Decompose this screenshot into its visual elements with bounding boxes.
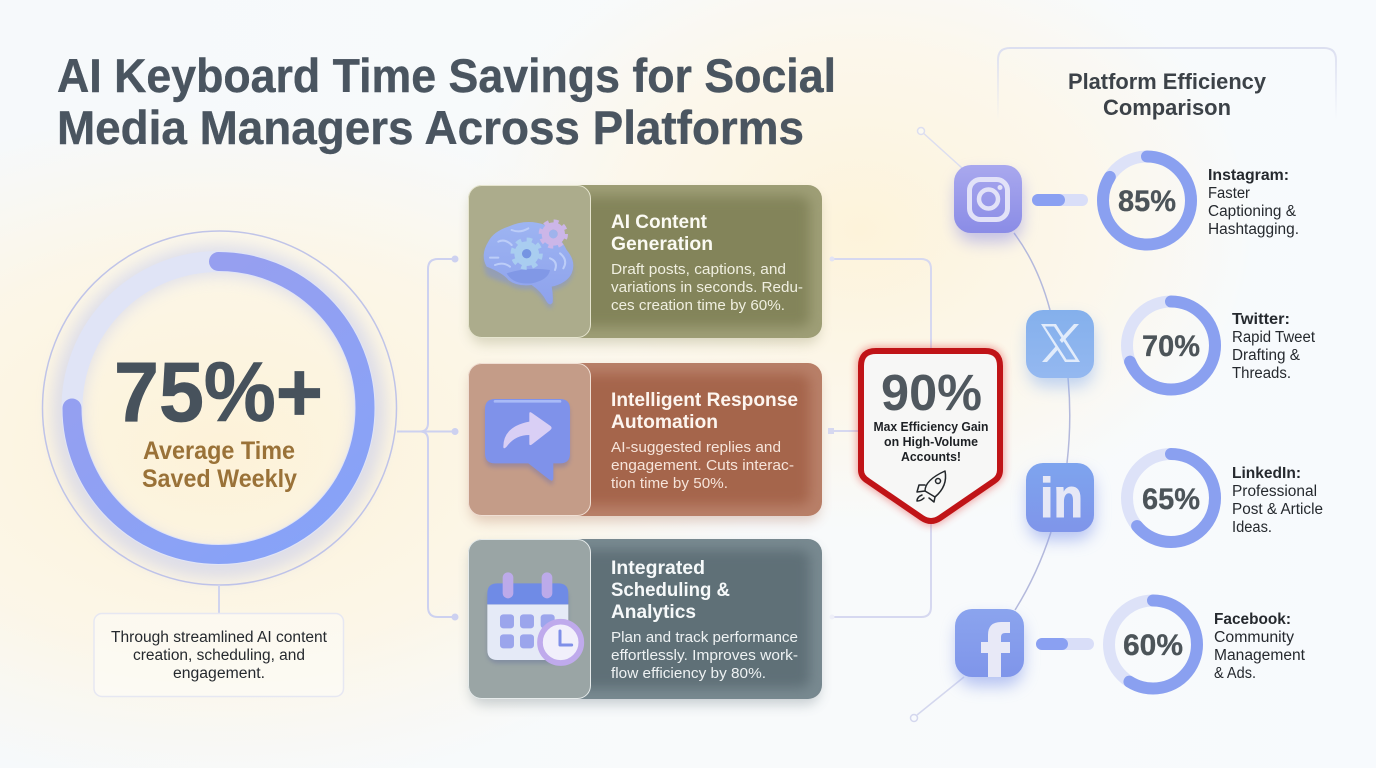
label: Faster — [1208, 185, 1250, 202]
donut 65%: 65% — [1142, 483, 1200, 516]
card body: AI-suggested replies and — [611, 440, 781, 456]
label: Twitter: — [1232, 311, 1290, 328]
label: Drafting & — [1232, 347, 1301, 364]
card body — [611, 440, 794, 492]
label: Professional — [1232, 483, 1317, 500]
hero label: Saved Weekly — [142, 465, 297, 493]
label: Captioning & — [1208, 203, 1297, 220]
caption box: creation, scheduling, and — [133, 647, 305, 664]
card heading — [611, 389, 798, 433]
icon pane — [468, 364, 590, 516]
caption box: engagement. — [173, 665, 265, 682]
title: Media Managers Across Platforms — [57, 101, 804, 154]
label: Facebook: — [1214, 611, 1291, 628]
donut 70% — [1127, 302, 1215, 390]
right connectors from cards to badge — [828, 256, 931, 620]
arrow — [503, 412, 552, 448]
progress pill — [1036, 638, 1094, 650]
label: Management — [1214, 647, 1306, 664]
hero label: Average Time — [143, 437, 295, 465]
icon: brain with gears — [484, 221, 573, 308]
label — [1232, 311, 1316, 382]
label — [1208, 167, 1299, 238]
label: Hashtagging. — [1208, 221, 1299, 238]
card body: flow efficiency by 80%. — [611, 666, 766, 682]
icon: in logo: in — [1040, 466, 1083, 529]
progress pill — [1032, 194, 1088, 206]
card heading: Scheduling & — [611, 579, 730, 601]
platform: Instagram — [954, 156, 1299, 244]
label: Community — [1214, 629, 1294, 646]
card: Intelligent Response Automation — [468, 363, 822, 522]
card: AI Content Generation — [468, 185, 822, 344]
donut 60%: 60% — [1123, 629, 1183, 662]
label: Ideas. — [1232, 519, 1272, 536]
badge text: Accounts! — [901, 450, 961, 464]
card heading: AI Content — [611, 211, 707, 233]
hero progress ring: 75% — [42, 231, 396, 585]
badge: 90% max efficiency — [861, 351, 1000, 521]
hero label — [142, 437, 297, 493]
card body: variations in seconds. Redu- — [611, 280, 803, 296]
left bracket connector — [397, 256, 458, 620]
hero value: 75%+ — [114, 345, 323, 439]
icon: rocket — [917, 471, 946, 502]
icon: Instagram logo — [970, 180, 1008, 220]
card body: tion time by 50%. — [611, 476, 728, 492]
donut 65% — [1127, 454, 1215, 542]
donut 70%: 70% — [1142, 330, 1200, 363]
platform: Facebook — [955, 600, 1306, 688]
badge text: Max Efficiency Gain — [874, 420, 988, 434]
gear small — [541, 221, 566, 247]
icon: f logo — [981, 622, 1010, 677]
platform connector curve — [910, 128, 1070, 722]
caption box — [94, 614, 344, 696]
badge text: on High-Volume — [884, 435, 978, 449]
card: Integrated Scheduling and Analytics — [468, 539, 822, 705]
badge value: 90% — [881, 364, 982, 421]
panel: platform comparison header — [998, 48, 1336, 120]
label — [1214, 611, 1306, 682]
donut 60% — [1109, 600, 1197, 688]
icon: X logo — [1041, 324, 1080, 362]
label: Post & Article — [1232, 501, 1323, 518]
card heading — [611, 557, 730, 623]
platform: LinkedIn — [1026, 454, 1323, 542]
label: & Ads. — [1214, 665, 1256, 682]
panel: platform comparison header: Comparison — [1103, 95, 1231, 120]
card body: Draft posts, captions, and — [611, 262, 786, 278]
label: Threads. — [1232, 365, 1291, 382]
card body — [611, 630, 798, 682]
card body: engagement. Cuts interac- — [611, 458, 794, 474]
icon: reply bubble — [485, 399, 570, 485]
panel: platform comparison header: Platform Efficiency — [1068, 69, 1267, 94]
title — [57, 49, 836, 154]
donut 85% — [1103, 156, 1191, 244]
label: LinkedIn: — [1232, 465, 1301, 482]
card body: ces creation time by 60%. — [611, 298, 785, 314]
badge text — [874, 420, 988, 464]
icon: calendar with clock — [487, 572, 581, 663]
label: Rapid Tweet — [1232, 329, 1316, 346]
card heading: Integrated — [611, 557, 705, 579]
card heading: Generation — [611, 233, 713, 255]
stem to caption — [218, 585, 220, 613]
gear large — [513, 240, 541, 268]
icon pane — [468, 540, 590, 698]
title: AI Keyboard Time Savings for Social — [57, 49, 836, 102]
icon pane — [468, 186, 590, 338]
platform: Twitter — [1026, 302, 1316, 390]
card heading — [611, 211, 713, 255]
label: Instagram: — [1208, 167, 1289, 184]
donut 85%: 85% — [1118, 185, 1176, 218]
card heading: Analytics — [611, 601, 696, 623]
card heading: Intelligent Response — [611, 389, 798, 411]
card body: effortlessly. Improves work- — [611, 648, 798, 664]
card heading: Automation — [611, 411, 718, 433]
label — [1232, 465, 1323, 536]
card body: Plan and track performance — [611, 630, 798, 646]
card body — [611, 262, 803, 314]
caption box: Through streamlined AI content — [111, 629, 328, 646]
